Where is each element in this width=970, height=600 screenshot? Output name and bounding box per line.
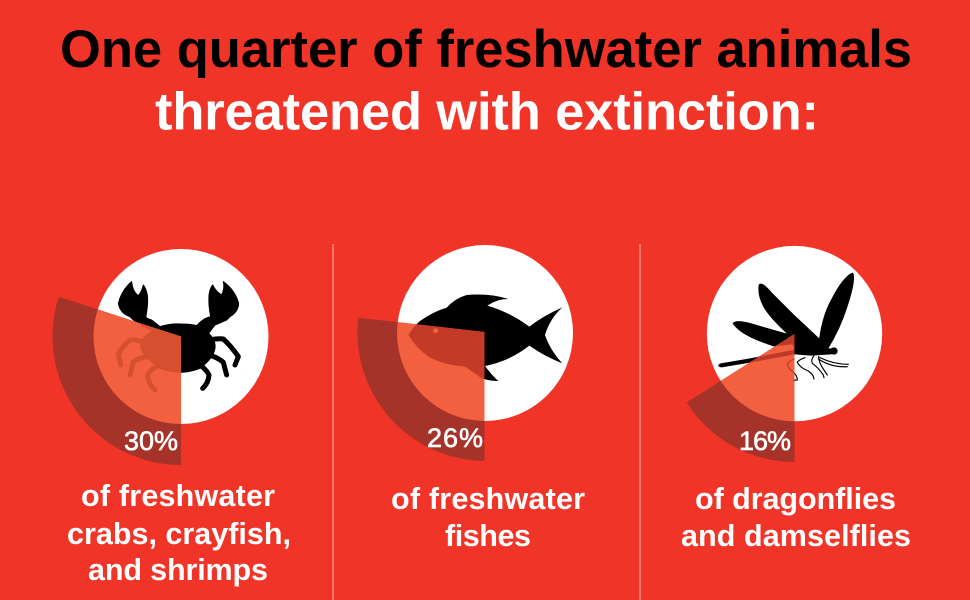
panel: dragonflies and damselflies <box>681 246 911 553</box>
caption: crabs: crabs, crayfish, <box>67 517 291 551</box>
caption: dragonflies <box>681 482 911 553</box>
caption: fishes <box>391 482 585 553</box>
column dividers <box>333 244 640 600</box>
title <box>60 20 912 142</box>
icon: fish <box>408 294 562 381</box>
title: threatened with extinction: <box>155 82 819 142</box>
wedge inner highlight <box>720 334 794 422</box>
panel: crabs, crayfish and shrimps <box>53 249 291 587</box>
caption: crabs: of freshwater <box>81 479 275 513</box>
white circle: dragonfly <box>707 246 882 421</box>
caption: crabs <box>67 479 291 587</box>
white circle: crab <box>94 249 268 424</box>
caption: fishes: fishes <box>445 519 531 553</box>
white circle: fish <box>397 245 573 421</box>
wedge inner highlight <box>397 322 484 421</box>
icon: dragonfly <box>718 273 853 380</box>
caption: dragonflies: of dragonflies <box>695 482 896 516</box>
percentage: 26%: 26% <box>427 423 483 453</box>
caption: crabs: and shrimps <box>88 553 268 587</box>
wedge inner highlight <box>94 310 181 424</box>
percentage: 30%: 30% <box>124 426 178 456</box>
pie wedge 16% <box>687 334 794 462</box>
pie wedge 30% <box>53 297 181 465</box>
caption: fishes: of freshwater <box>391 482 585 516</box>
icon: crab <box>118 282 239 390</box>
panel: freshwater fishes <box>357 245 585 553</box>
percentage: 16%: 16% <box>739 426 791 456</box>
caption: dragonflies: and damselflies <box>681 519 911 553</box>
pie wedge 26% <box>357 318 484 461</box>
title: One quarter of freshwater animals <box>60 20 912 79</box>
